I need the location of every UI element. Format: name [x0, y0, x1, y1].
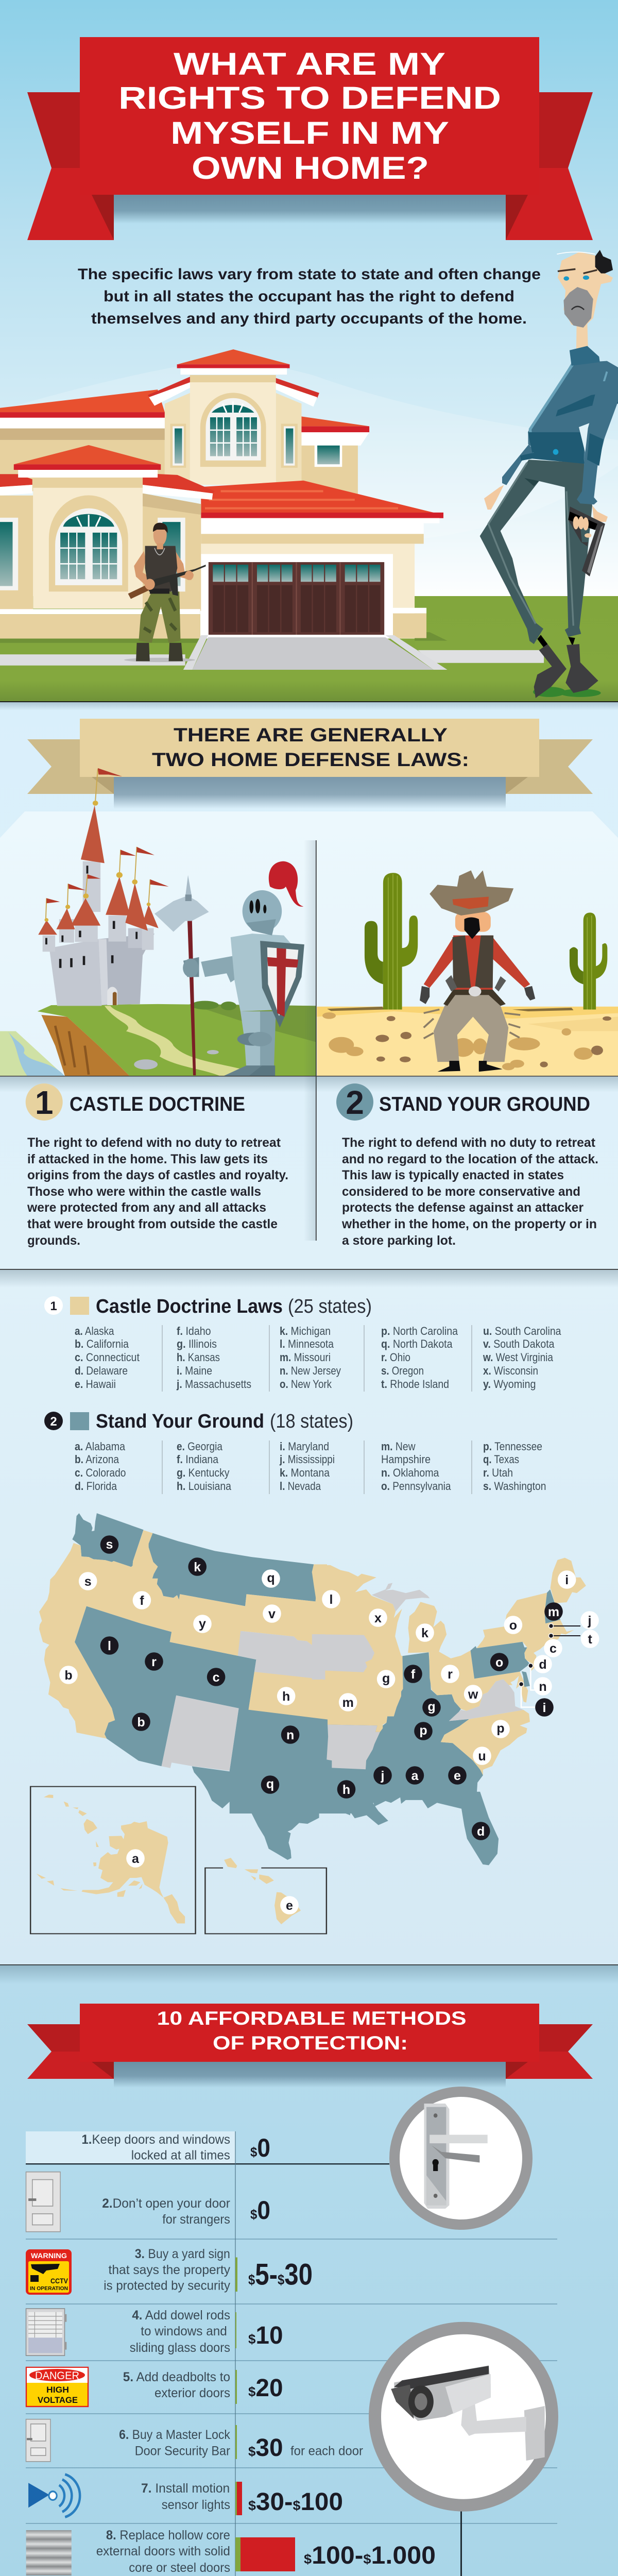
intro text — [78, 266, 541, 327]
state list: castle doctrine: u. South Carolina — [483, 1325, 561, 1337]
heading banner: 10 affordable methods: 10 AFFORDABLE METHODS — [157, 2008, 467, 2029]
US map: a — [132, 1852, 140, 1866]
US map: f — [140, 1594, 144, 1608]
legend: castle doctrine laws: 1 — [50, 1299, 57, 1313]
state list: castle doctrine: d. Delaware — [75, 1364, 128, 1377]
section divider: map to methods — [0, 1964, 618, 1984]
US map: n — [539, 1680, 547, 1694]
divider above state lists — [0, 1269, 618, 1287]
US map: b — [137, 1715, 145, 1730]
row 5: danger sign and deadbolts: DANGER — [35, 2370, 79, 2382]
heading banner: two laws: TWO HOME DEFENSE LAWS: — [152, 749, 469, 770]
US map: k — [421, 1626, 428, 1640]
row 3: yard sign — [26, 2247, 313, 2295]
state list: castle doctrine: p. North Carolina — [381, 1325, 458, 1337]
US map: m — [342, 1696, 354, 1710]
row 4: window and dowel rods: $10 — [248, 2322, 283, 2349]
state list: stand your ground: d. Florida — [75, 1480, 117, 1493]
row 1: keep doors locked: locked at all times — [131, 2148, 230, 2163]
state list: stand your ground: a. Alabama — [75, 1440, 126, 1453]
state list: castle doctrine: g. Illinois — [177, 1337, 217, 1350]
US map: g — [382, 1671, 390, 1686]
state list: stand your ground — [75, 1440, 546, 1494]
US map: j — [588, 1614, 591, 1628]
US map: e — [286, 1899, 293, 1913]
US map: c — [213, 1670, 220, 1685]
panel: stand your ground: STAND YOUR GROUND — [379, 1093, 590, 1115]
panel: stand your ground: 2 — [346, 1084, 364, 1121]
row 4: window and dowel rods: 4. Add dowel rods — [132, 2308, 230, 2323]
US map: w — [468, 1687, 478, 1702]
row 7: motion sensor lights: sensor lights — [162, 2498, 230, 2512]
state list: castle doctrine: r. Ohio — [381, 1351, 410, 1364]
US map: l — [330, 1592, 333, 1607]
US map: b — [64, 1668, 73, 1683]
row 8: replace doors: $100-$1.000 — [304, 2542, 436, 2569]
state list: castle doctrine: k. Michigan — [280, 1325, 331, 1337]
state list: stand your ground: o. Pennsylvania — [381, 1480, 451, 1493]
US map: g — [427, 1700, 436, 1714]
US map: p — [496, 1721, 505, 1736]
state list: stand your ground: r. Utah — [483, 1466, 513, 1479]
legend: stand your ground: (18 states) — [270, 1411, 353, 1432]
icon: security camera in circle — [375, 2328, 552, 2505]
row 6: door security bar — [26, 2419, 363, 2462]
illustration: old man with pistol — [480, 250, 618, 698]
US map: c — [550, 1641, 557, 1656]
state list: stand your ground: q. Texas — [483, 1453, 519, 1466]
row 7: motion sensor lights: 7. Install motion — [141, 2481, 230, 2496]
divider under illustrations — [0, 1076, 618, 1092]
panel: stand your ground: The right to defend with no duty to retreat — [342, 1136, 596, 1150]
panel: castle doctrine: The right to defend with no duty to retreat — [27, 1136, 281, 1150]
US map: e — [454, 1769, 461, 1783]
panel: stand your ground: protects the defense against an attacker — [342, 1200, 583, 1215]
row 3: yard sign: 3. Buy a yard sign — [135, 2247, 230, 2261]
row 6: door security bar: Door Security Bar — [135, 2444, 230, 2459]
row 8: replace doors: core or steel doors — [129, 2561, 230, 2575]
US map: i — [565, 1573, 569, 1587]
state list: castle doctrine: l. Minnesota — [280, 1337, 334, 1350]
state list: castle doctrine: n. New Jersey — [280, 1364, 341, 1377]
row 7: motion sensor lights: $30-$100 — [248, 2488, 343, 2516]
row 6: door security bar: 6. Buy a Master Lock — [119, 2428, 230, 2442]
state list: stand your ground: g. Kentucky — [177, 1466, 230, 1479]
state list: castle doctrine: m. Missouri — [280, 1351, 331, 1364]
row 5: danger sign and deadbolts: 5. Add deadbolts to — [123, 2370, 230, 2384]
US map: i — [543, 1701, 546, 1715]
state list: castle doctrine — [75, 1325, 561, 1392]
row 4: window and dowel rods: to windows and — [141, 2324, 227, 2338]
heading banner: 10 affordable methods: OF PROTECTION: — [213, 2032, 408, 2054]
US map: d — [539, 1657, 547, 1672]
legend: stand your ground: Stand Your Ground — [96, 1411, 264, 1432]
US map: r — [151, 1655, 157, 1669]
row 4: window and dowel rods: sliding glass doors — [130, 2341, 230, 2355]
panel: castle doctrine: 1 — [35, 1084, 53, 1121]
US map: u — [478, 1749, 486, 1764]
US map: s — [106, 1537, 113, 1552]
state list: castle doctrine: h. Kansas — [177, 1351, 220, 1364]
illustration: desert and cowboy — [317, 870, 618, 1076]
legend: castle doctrine laws: (25 states) — [288, 1296, 372, 1317]
US map: s — [84, 1574, 92, 1589]
state list: stand your ground: s. Washington — [483, 1480, 546, 1493]
row 3: yard sign: IN OPERATION — [30, 2286, 68, 2292]
state list: stand your ground: k. Montana — [280, 1466, 330, 1479]
state list: stand your ground: l. Nevada — [280, 1480, 321, 1493]
US map: v — [268, 1607, 276, 1621]
US map: l — [108, 1639, 111, 1653]
row 5: danger sign and deadbolts: $20 — [248, 2375, 283, 2402]
US map: p — [419, 1723, 427, 1738]
connector to security system — [26, 2504, 461, 2576]
state list: stand your ground: b. Arizona — [75, 1453, 119, 1466]
state list: stand your ground: Hampshire — [381, 1453, 431, 1466]
legend: stand your ground — [44, 1411, 353, 1432]
US map: j — [381, 1769, 384, 1783]
row 8: replace doors: 8. Replace hollow core — [106, 2528, 230, 2543]
row 1: keep doors locked: $0 — [250, 2133, 270, 2162]
row 1: keep doors locked: 1.Keep doors and windows — [81, 2132, 230, 2147]
state list: castle doctrine: s. Oregon — [381, 1364, 424, 1377]
row 4: window and dowel rods — [26, 2308, 283, 2355]
US map: y — [199, 1617, 206, 1631]
US map: d — [477, 1824, 485, 1839]
row 3: yard sign: CCTV — [50, 2277, 68, 2285]
state list: stand your ground: m. New — [381, 1440, 416, 1453]
state list: stand your ground: e. Georgia — [177, 1440, 223, 1453]
US map: r — [448, 1667, 453, 1682]
US map: n — [286, 1728, 294, 1742]
state list: castle doctrine: t. Rhode Island — [381, 1378, 449, 1391]
state list: castle doctrine: b. California — [75, 1337, 129, 1350]
panel: castle doctrine: were protected from any and all attacks — [27, 1200, 266, 1215]
intro text: but in all states the occupant has the right to defend — [104, 288, 514, 305]
panel: castle doctrine: grounds. — [27, 1233, 80, 1248]
panel: stand your ground: considered to be more conservative and — [342, 1184, 580, 1199]
US map: o — [495, 1655, 503, 1670]
panel: two laws light backdrop — [0, 811, 618, 1076]
state list: castle doctrine: y. Wyoming — [483, 1378, 536, 1391]
row 3: yard sign: that says the property — [108, 2263, 230, 2277]
intro text: The specific laws vary from state to state and often change — [78, 266, 541, 283]
US map: q — [266, 1777, 274, 1791]
row 6: door security bar: $30 — [248, 2434, 283, 2462]
panel: castle doctrine: CASTLE DOCTRINE — [70, 1093, 245, 1115]
intro text: themselves and any third party occupants of the home. — [91, 310, 527, 327]
illustration: house with ground — [0, 349, 544, 670]
US map: q — [267, 1571, 275, 1585]
state list: stand your ground: f. Indiana — [177, 1453, 219, 1466]
state list: stand your ground: h. Louisiana — [177, 1480, 232, 1493]
US map: h — [282, 1689, 290, 1704]
legend: stand your ground: 2 — [50, 1415, 57, 1429]
panel: stand your ground — [336, 1083, 598, 1248]
state list: stand your ground: p. Tennessee — [483, 1440, 542, 1453]
state list: castle doctrine: o. New York — [280, 1378, 332, 1391]
US map: h — [342, 1783, 350, 1797]
state list: castle doctrine: v. South Dakota — [483, 1337, 555, 1350]
row 5: danger sign and deadbolts — [26, 2367, 283, 2406]
state list: stand your ground: j. Mississippi — [279, 1453, 335, 1466]
state list: castle doctrine: j. Massachusetts — [176, 1378, 251, 1391]
divider between the two laws — [304, 840, 317, 1241]
title banner: MYSELF IN MY — [170, 115, 449, 150]
row 3: yard sign: WARNING — [31, 2251, 67, 2260]
panel: stand your ground: and no regard to the location of the attack. — [342, 1152, 598, 1166]
icon: door lock in circle — [394, 2092, 527, 2225]
heading banner: two laws — [27, 719, 593, 809]
state list: castle doctrine: c. Connecticut — [75, 1351, 140, 1364]
row 1: keep doors locked — [81, 2132, 270, 2163]
state list: castle doctrine: x. Wisconsin — [483, 1364, 538, 1377]
state list: castle doctrine: q. North Dakota — [381, 1337, 453, 1350]
US map: f — [411, 1667, 416, 1682]
panel: stand your ground: whether in the home, on the property or in — [341, 1217, 597, 1231]
row 2: door icon and text — [26, 2172, 270, 2232]
row 8: replace doors — [26, 2528, 436, 2575]
panel: castle doctrine: origins from the days of castles and royalty. — [27, 1168, 288, 1182]
US map: o — [509, 1618, 517, 1633]
illustration: castle and knight — [0, 768, 316, 1076]
US map: m — [548, 1605, 559, 1619]
state list: castle doctrine: e. Hawaii — [75, 1378, 116, 1391]
illustration: soldier with rifle — [124, 523, 205, 662]
row 7: motion sensor lights — [28, 2475, 343, 2517]
row 5: danger sign and deadbolts: VOLTAGE — [38, 2395, 78, 2405]
US map: x — [374, 1611, 382, 1625]
methods table rules — [26, 2131, 557, 2576]
US map — [30, 1513, 599, 1934]
state list: castle doctrine: i. Maine — [177, 1364, 212, 1377]
row 5: danger sign and deadbolts: exterior doors — [154, 2386, 230, 2400]
title banner — [27, 37, 593, 240]
legend: castle doctrine laws — [44, 1296, 372, 1317]
row 3: yard sign: $5-$30 — [248, 2258, 313, 2292]
US map: a — [411, 1769, 419, 1783]
state list: stand your ground: c. Colorado — [75, 1466, 126, 1479]
panel: castle doctrine — [26, 1083, 288, 1248]
heading banner: 10 affordable methods — [27, 2004, 593, 2088]
panel: stand your ground: This law is typically enacted in states — [342, 1168, 564, 1182]
row 8: replace doors: external doors with solid — [96, 2544, 230, 2558]
row 3: yard sign: is protected by security — [104, 2278, 230, 2293]
panel: castle doctrine: that were brought from outside the castle — [27, 1217, 278, 1231]
US map: k — [194, 1560, 201, 1574]
US map: t — [588, 1632, 593, 1647]
state list: castle doctrine: w. West Virginia — [483, 1351, 554, 1364]
row 2: door icon and text: for strangers — [162, 2212, 230, 2227]
state list: castle doctrine: a. Alaska — [75, 1325, 114, 1337]
state list: stand your ground: i. Maryland — [280, 1440, 329, 1453]
panel: stand your ground: a store parking lot. — [342, 1233, 456, 1248]
title banner: WHAT ARE MY — [174, 46, 445, 81]
section divider: grass to laws — [0, 701, 618, 710]
legend: castle doctrine laws: Castle Doctrine Laws — [96, 1296, 283, 1317]
row 2: door icon and text: $0 — [250, 2196, 270, 2225]
row 5: danger sign and deadbolts: HIGH — [46, 2385, 69, 2395]
row 6: door security bar: for each door — [290, 2444, 363, 2459]
panel: castle doctrine: if attacked in the home. This law gets its — [27, 1152, 268, 1166]
title banner: RIGHTS TO DEFEND — [118, 80, 501, 115]
title banner: OWN HOME? — [192, 150, 429, 185]
heading banner: two laws: THERE ARE GENERALLY — [174, 724, 448, 745]
row 2: door icon and text: 2.Don’t open your door — [102, 2196, 230, 2211]
state list: stand your ground: n. Oklahoma — [381, 1466, 439, 1479]
state list: castle doctrine: f. Idaho — [177, 1325, 211, 1337]
panel: castle doctrine: Those who were within the castle walls — [27, 1184, 261, 1199]
